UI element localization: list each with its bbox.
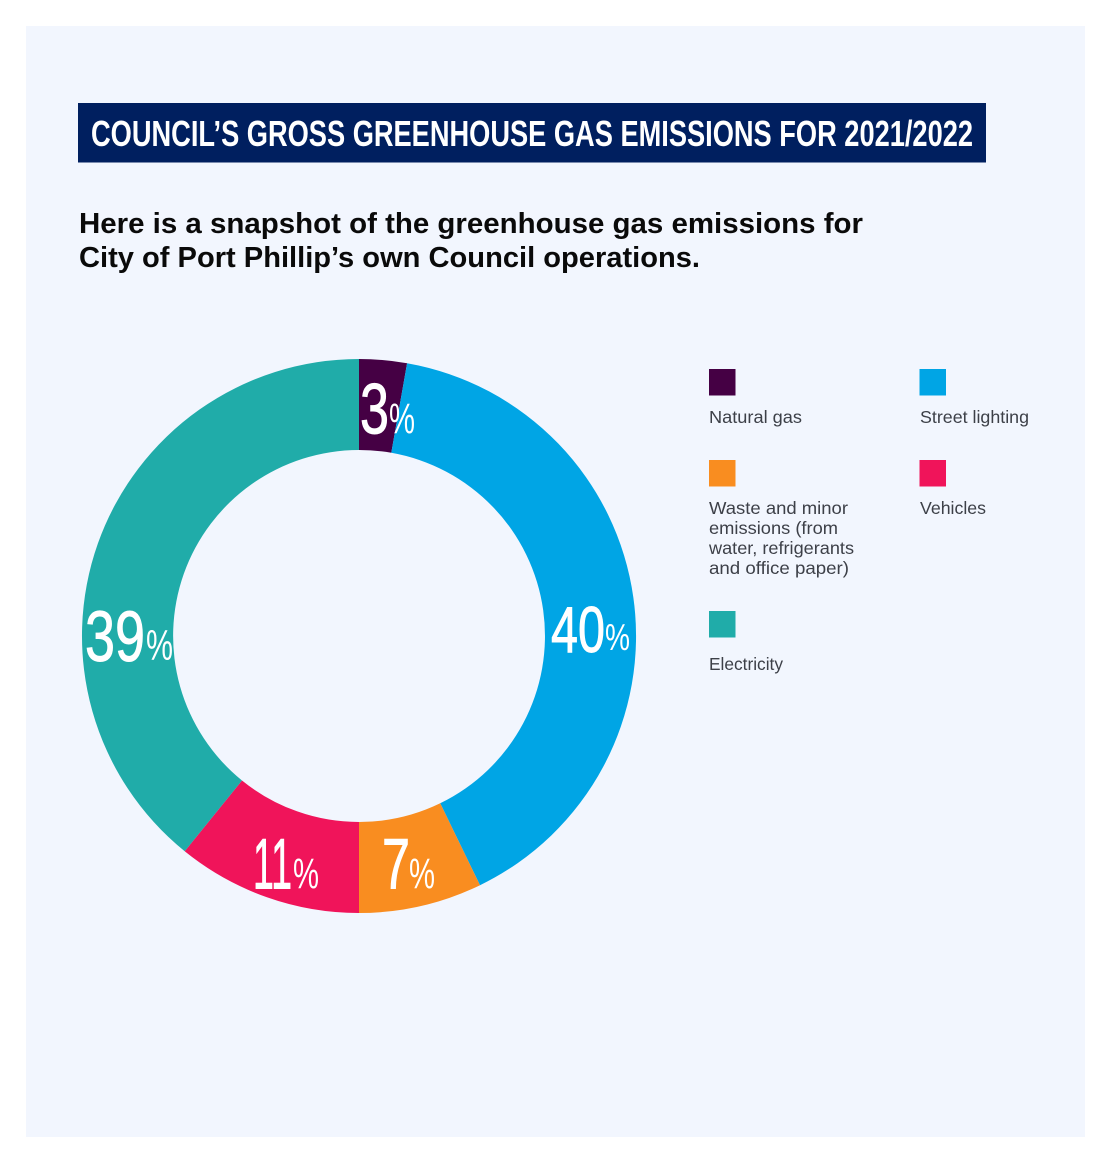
intro text: Here is a snapshot of the greenhouse gas emissions for [79, 208, 863, 240]
legend item: natural gas: Natural gas [709, 407, 802, 427]
label: 40%: % [605, 617, 630, 658]
legend item: electricity: Electricity [709, 654, 783, 674]
legend item: natural gas [709, 369, 802, 427]
legend item: waste and minor emissions: water, refrigerants [708, 538, 854, 558]
legend item: electricity [709, 611, 783, 674]
label: 3%: 3 [360, 370, 389, 450]
legend item: vehicles: Vehicles [920, 498, 986, 518]
donut chart [82, 359, 636, 913]
label: 39%: 39 [85, 598, 145, 677]
intro text [79, 208, 863, 274]
label: 7%: 7 [382, 826, 410, 904]
segment: natural gas 3% [359, 359, 407, 453]
legend item: waste and minor emissions: and office paper) [709, 558, 849, 578]
legend item: waste and minor emissions: emissions (from [709, 518, 838, 538]
segment: electricity 39% [82, 359, 359, 851]
legend item: street lighting [920, 369, 1029, 427]
legend item: vehicles [920, 460, 986, 518]
label: 3%: % [389, 396, 415, 444]
label: 40%: 40 [551, 593, 605, 666]
segment: waste and minor emissions 7% [359, 803, 480, 913]
label: 11%: 11 [253, 826, 292, 904]
title banner [78, 103, 986, 162]
segment: vehicles 11% [185, 780, 359, 913]
legend [708, 369, 1029, 674]
label: 7%: % [409, 850, 435, 898]
label: 11%: % [293, 850, 319, 898]
segment: street lighting 40% [391, 363, 636, 885]
intro text: City of Port Phillip’s own Council operations. [79, 242, 700, 274]
legend item: waste and minor emissions [708, 460, 854, 578]
label: 39%: % [146, 622, 173, 670]
legend item: street lighting: Street lighting [920, 407, 1029, 427]
legend item: waste and minor emissions: Waste and minor [709, 498, 848, 518]
